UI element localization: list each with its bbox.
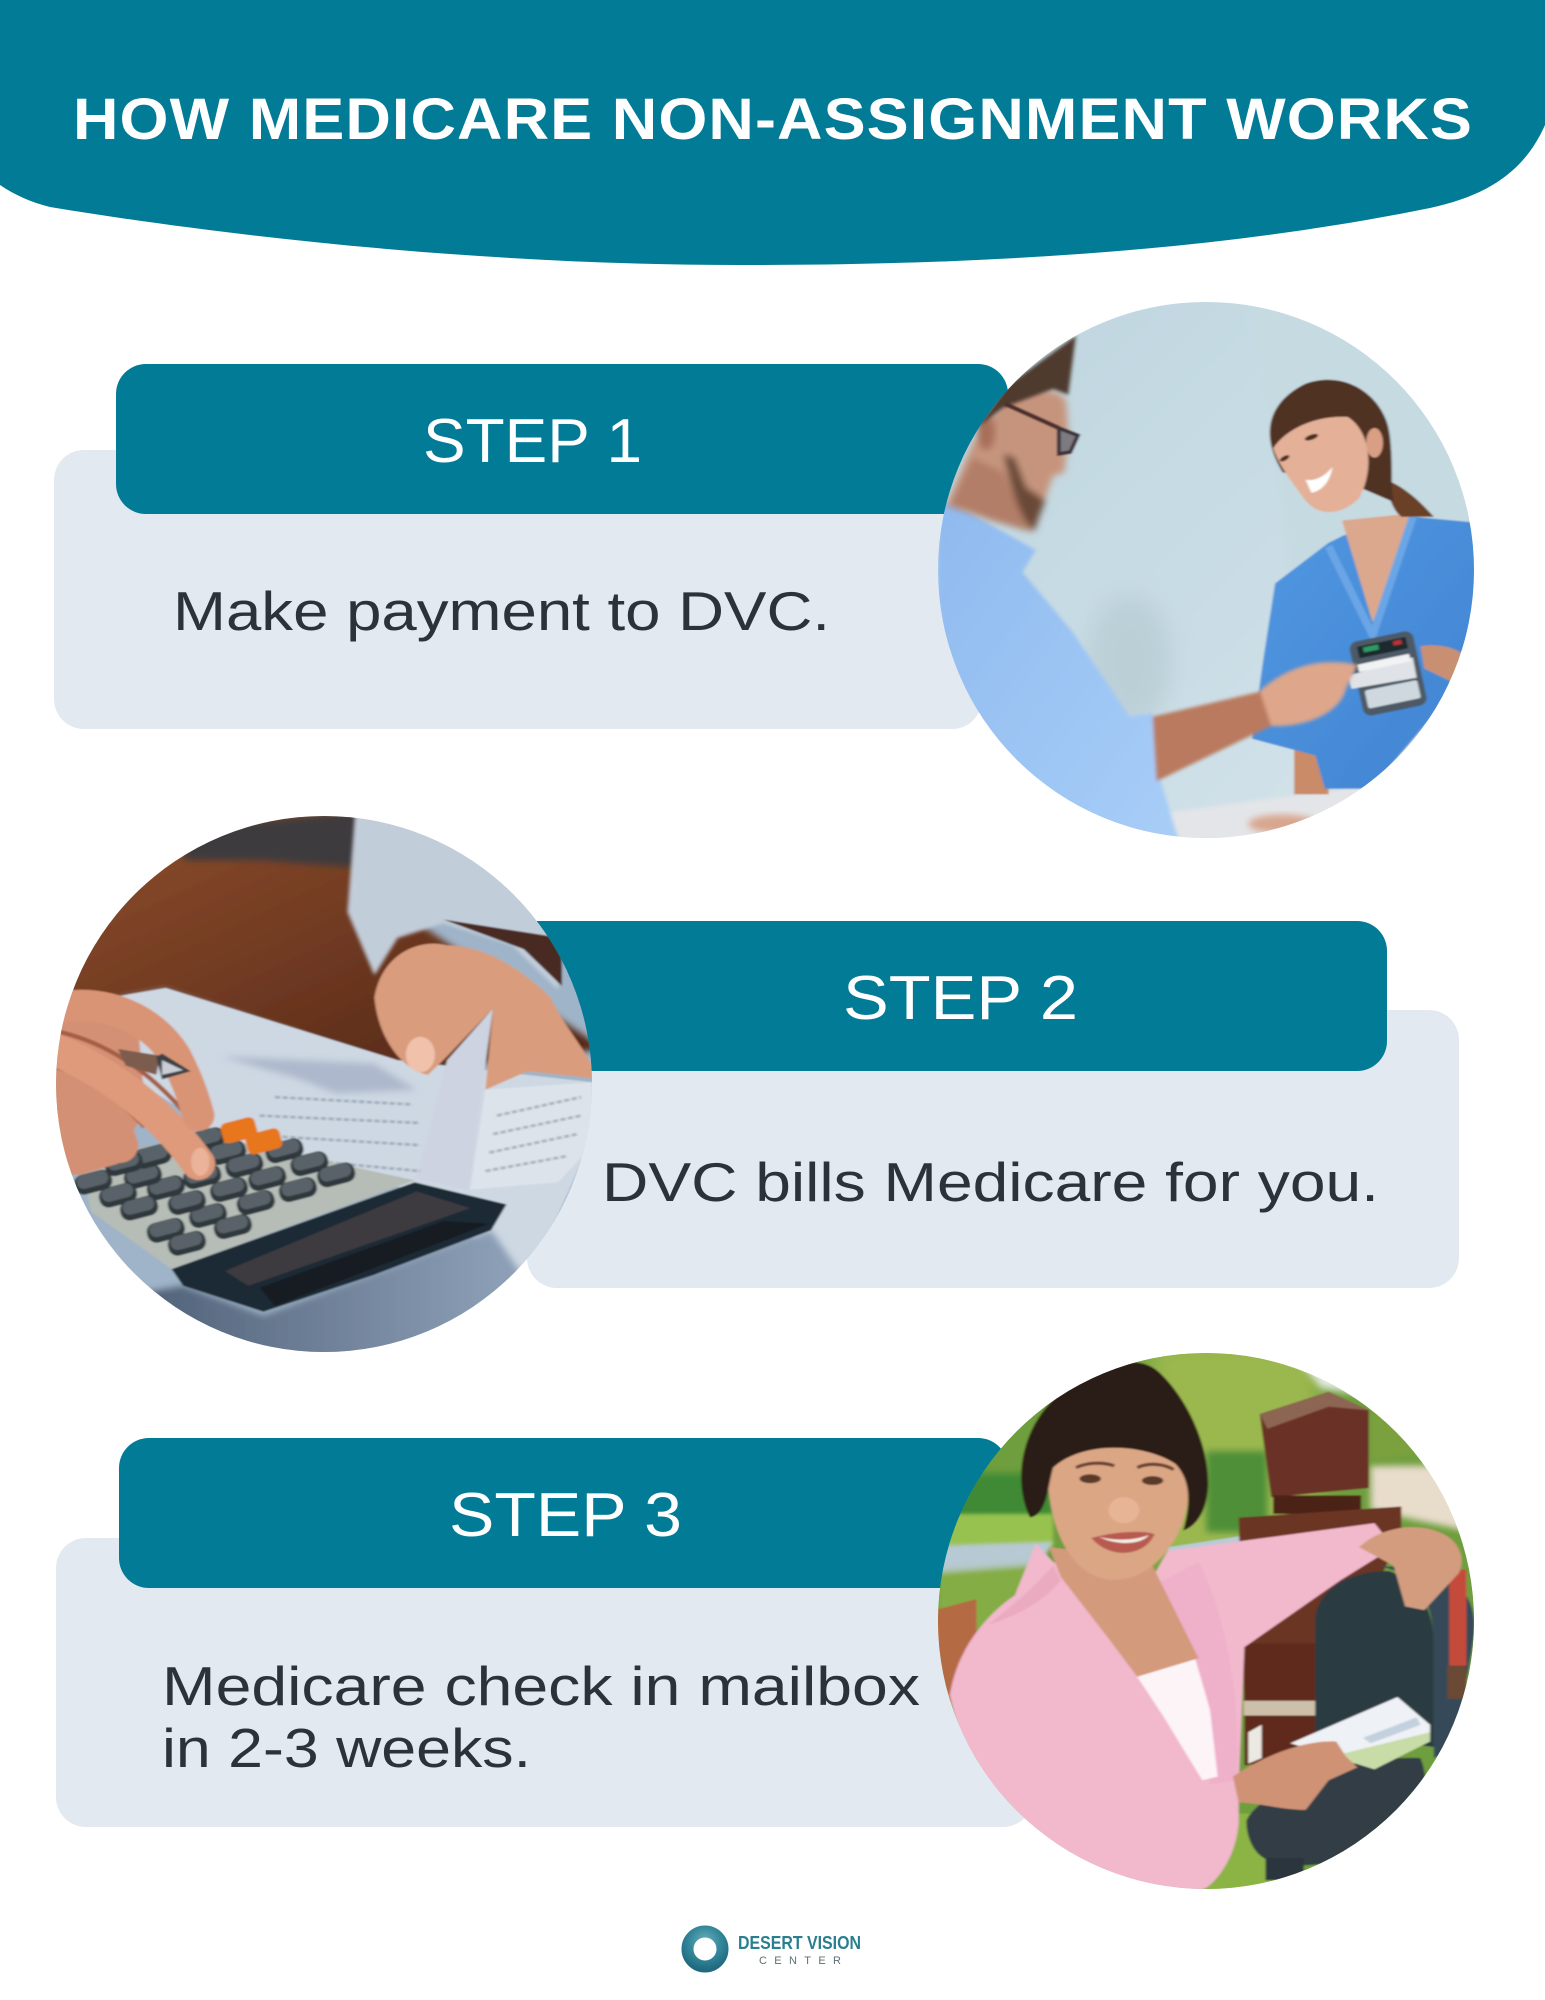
step 3 body card <box>56 1538 1033 1827</box>
header banner <box>0 0 1545 265</box>
logo name: DESERT VISION <box>738 1933 861 1953</box>
photo: payment at reception desk <box>938 302 1474 838</box>
photo: woman at mailbox <box>938 1353 1474 1889</box>
step 2 heading bar <box>480 921 1387 1071</box>
photo: calculator and tax forms <box>56 816 592 1352</box>
step 1 heading bar <box>116 364 1008 514</box>
step 3 text: in 2-3 weeks. <box>162 1717 531 1779</box>
step 1 text: Make payment to DVC. <box>173 580 830 642</box>
footer logo <box>688 1932 861 1967</box>
logo subname: CENTER <box>759 1955 841 1967</box>
step 2 heading: STEP 2 <box>843 964 1078 1033</box>
step 3 heading: STEP 3 <box>449 1481 682 1550</box>
step 3 text <box>162 1655 920 1779</box>
step 1 body card <box>54 450 982 729</box>
step 2 text: DVC bills Medicare for you. <box>602 1151 1379 1213</box>
panel: step 3 <box>56 1353 1474 1889</box>
step 3 text: Medicare check in mailbox <box>162 1655 920 1717</box>
icon: logo ring <box>688 1932 722 1966</box>
title: HOW MEDICARE NON-ASSIGNMENT WORKS <box>73 87 1473 152</box>
step 2 body card <box>527 1010 1459 1288</box>
panel: step 1 <box>54 302 1474 838</box>
step 1 heading: STEP 1 <box>423 407 642 476</box>
panel: step 2 <box>56 816 1459 1352</box>
step 3 heading bar <box>119 1438 1008 1588</box>
